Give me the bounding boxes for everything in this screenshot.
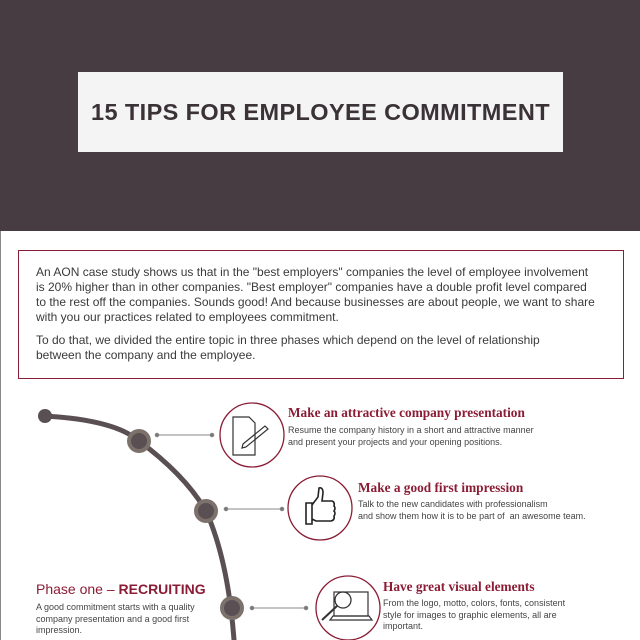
phase one heading and description xyxy=(36,581,206,635)
tip 3: Have great visual elements xyxy=(383,579,535,594)
tip 3: From the logo, motto, colors, fonts, consistent xyxy=(383,598,565,608)
title xyxy=(78,72,563,152)
tip 2: Make a good first impression xyxy=(358,480,523,495)
phase one heading and description: impression. xyxy=(36,625,82,635)
intro text box: To do that, we divided the entire topic in three phases which depend on the level of relationship xyxy=(36,333,540,347)
tip 3: important. xyxy=(383,621,423,631)
icon: laptop with magnifier xyxy=(316,576,380,640)
intro text box: An AON case study shows us that in the "best employers" companies the level of employee involvement xyxy=(36,265,588,279)
connectors xyxy=(155,433,308,610)
tip 1: and present your projects and your opening positions. xyxy=(288,436,502,446)
tip 1: Make an attractive company presentation xyxy=(288,405,525,420)
icon: thumbs up xyxy=(288,476,352,540)
header band xyxy=(0,0,640,231)
phase one heading and description: Phase one – RECRUITING xyxy=(36,581,206,597)
intro text box: with you our practices related to employees commitment. xyxy=(36,310,339,324)
icon: document with pencil xyxy=(220,403,284,467)
tip 3 xyxy=(383,579,566,631)
phase one heading and description: A good commitment starts with a quality xyxy=(36,602,195,612)
tip 3: style for images to graphic elements, all are xyxy=(383,610,557,620)
tip 2: and show them how it is to be part of an awesome team. xyxy=(358,510,586,520)
intro text box: to the rest off the companies. Sounds good! And because businesses are about people, we want to share xyxy=(36,295,595,309)
intro text box: between the company and the employee. xyxy=(36,348,255,362)
intro text box: is 20% higher than in other companies. "Best employer" companies have a double profit level compared xyxy=(36,280,587,294)
intro text box xyxy=(18,250,624,379)
tip 1 xyxy=(288,405,534,447)
tip 2 xyxy=(358,480,586,521)
arc xyxy=(38,409,244,640)
title: 15 TIPS FOR EMPLOYEE COMMITMENT xyxy=(91,98,550,124)
phase one heading and description: company presentation and a good first xyxy=(36,614,189,624)
tip 1: Resume the company history in a short and attractive manner xyxy=(288,425,534,435)
tip 2: Talk to the new candidates with professionalism xyxy=(358,499,548,509)
